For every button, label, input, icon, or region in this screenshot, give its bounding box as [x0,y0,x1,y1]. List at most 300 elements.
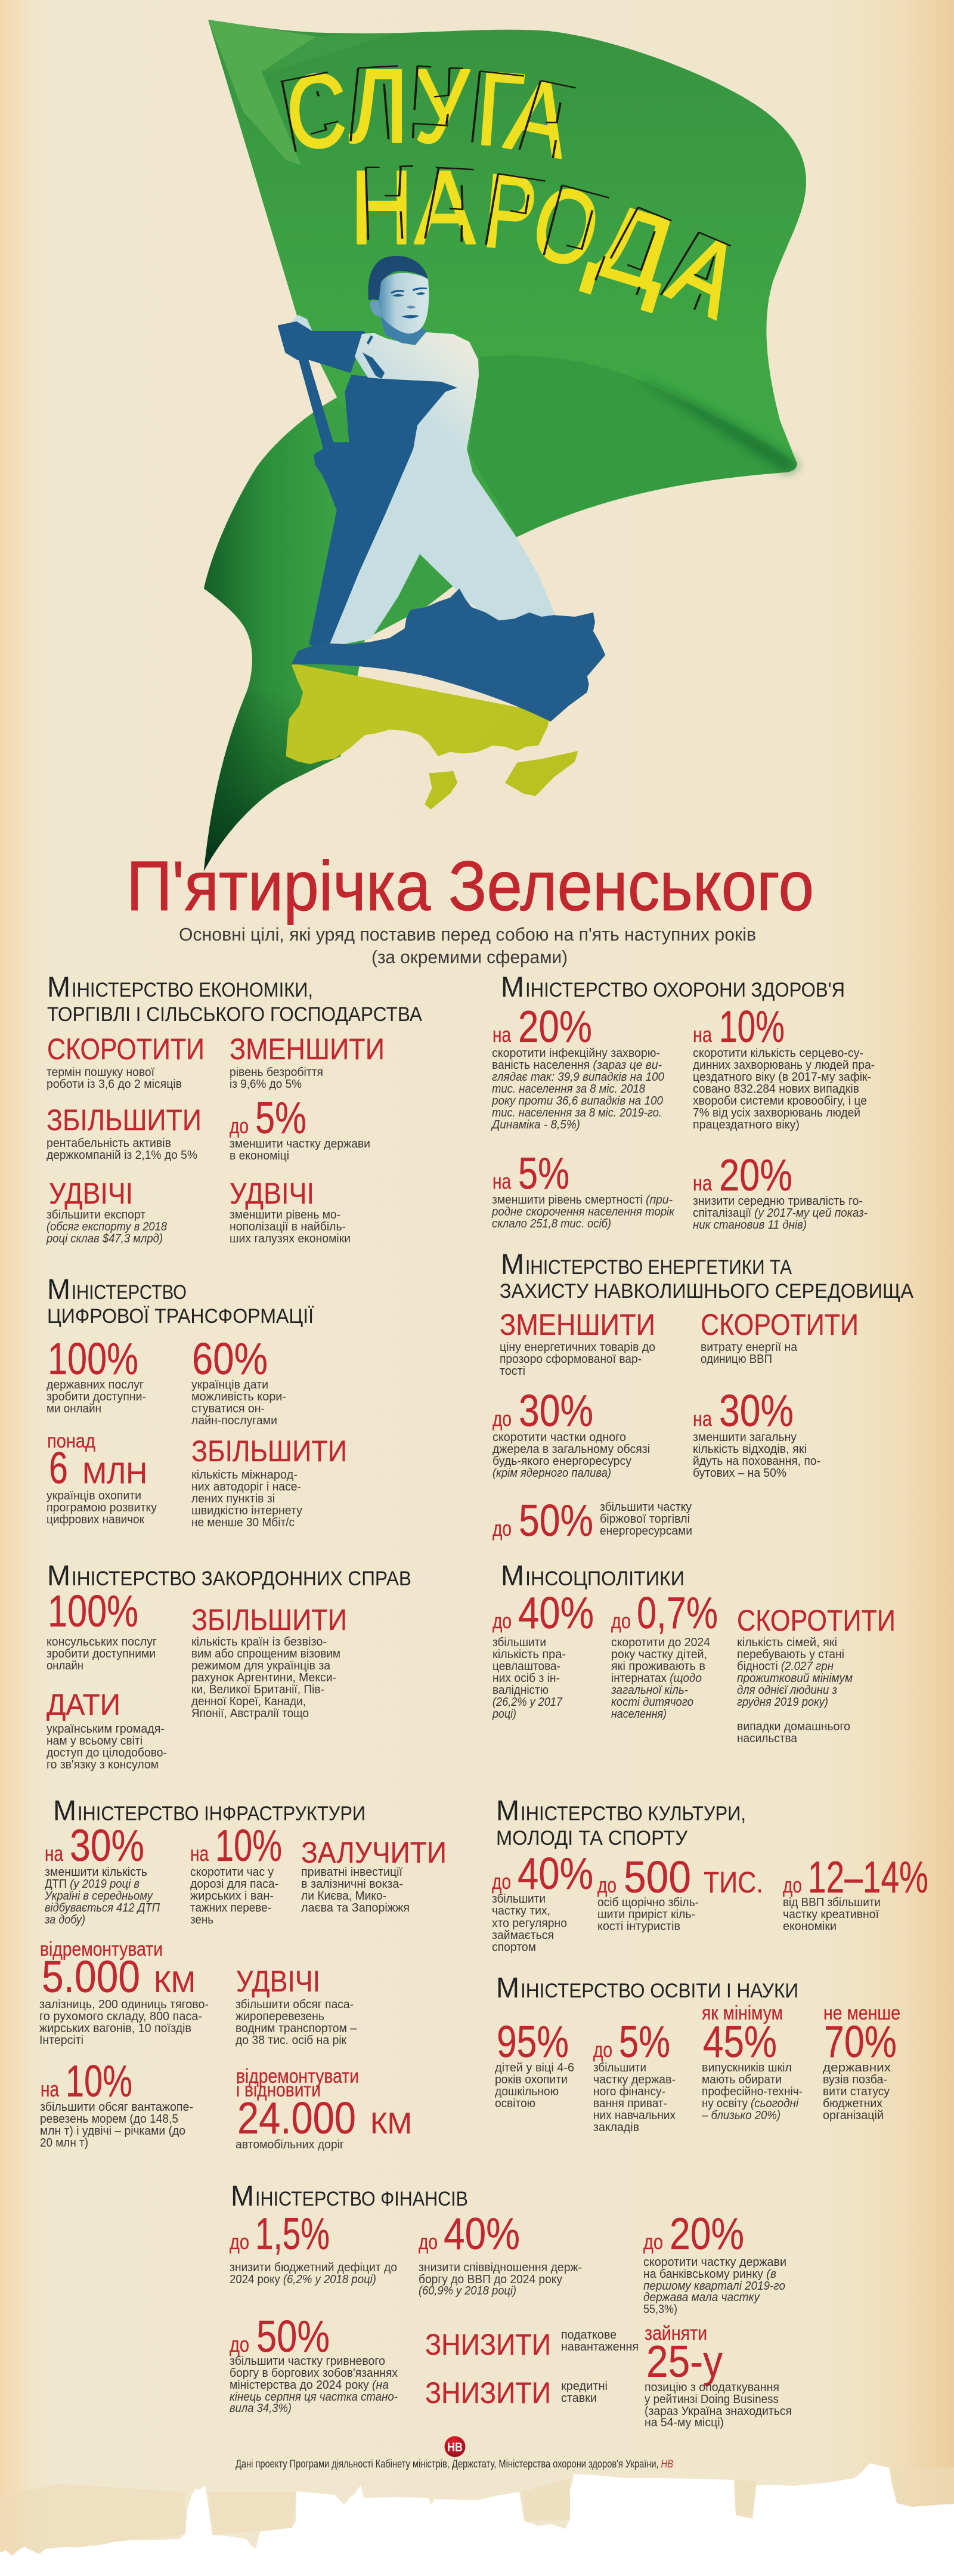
stat: дати: доступ до цілодобово- [47,1746,167,1759]
stat: скоротити: СКОРОТИТИ [737,1604,896,1637]
stat: до 50%: 50% [256,2311,330,2361]
stat: удвічі export: році склав $47,3 млрд) [46,1232,163,1245]
stat: до 12–14% [783,1852,928,1933]
stat: до 500 тис.: шити приріст кіль- [597,1908,695,1921]
stat: до 20%: 55,3%) [643,2303,677,2316]
stat: до 0,7%: які проживають в [611,1660,705,1673]
stat: до 40%: спортом [492,1941,536,1954]
stat: понад 6 млн: цифрових навичок [47,1513,144,1526]
stat: 95%: дітей у віці 4-6 [495,2061,574,2074]
stat: до 1,5%: 1,5% [255,2209,330,2259]
stat: на 30%: зменшити загальну [693,1431,797,1444]
stat: на 20% hospital: спіталізації (у 2017-му цей показ- [693,1207,868,1220]
heading [231,2181,468,2212]
stat: на 10% cargo: млн т) і удвічі – річками (до [40,2124,185,2138]
stat: до 50%: до [493,1516,512,1541]
stat: 24.000 км: КМ [370,2107,412,2140]
stat: до 1,5%: знизити бюджетний дефіцит до [230,2261,397,2274]
stat: на 10% cardio: скоротити кількість серцево-су- [693,1047,863,1060]
heading: ІНІСТЕРСТВО ОХОРОНИ ЗДОРОВ'Я [525,979,845,1001]
stat: на 20% infections [491,1001,664,1131]
stat: до 20%: скоротити частку держави [643,2256,786,2269]
heading: ІНІСТЕРСТВО ФІНАНСІВ [255,2188,468,2210]
stat: збільшити: ки, Великої Британії, Пів- [191,1683,324,1696]
stat: збільшити: ЗБІЛЬШИТИ [191,1603,347,1637]
stat: знизити tax burden: податкове [561,2328,617,2342]
stat: на 10% cardio: цездатного віку (в 2017-му зафік- [693,1071,871,1084]
icon: NV logo: НВ [447,2441,463,2454]
heading: МОЛОДІ ТА СПОРТУ [496,1827,687,1850]
stat: скоротити: випадки домашнього [737,1720,850,1733]
stat: скоротити: СКОРОТИТИ [47,1032,205,1066]
stat: удвічі monopoly [230,1177,351,1245]
stat: на 10% travel: зень [190,1913,213,1926]
stat: на 10% cargo [40,2056,193,2150]
stat: до 40%: них осіб з ін- [493,1672,560,1685]
stat: збільшити [47,1103,202,1162]
stat: до 30%: 30% [519,1386,593,1436]
heading: ІНІСТЕРСТВО ЗАКОРДОННИХ СПРАВ [72,1567,411,1590]
stat: до 0,7%: скоротити до 2024 [611,1636,710,1649]
stat: на 20% hospital [693,1150,868,1232]
stat: понад 6 млн: українців охопити [47,1489,141,1502]
figure holding flag pole [279,256,555,647]
heading [501,1560,684,1592]
stat: на 30%: на [693,1406,713,1431]
stat: на 5%: на [493,1169,512,1193]
stat: 5.000 км [39,1938,209,2047]
stat: залучити: в залізничні вокза- [301,1878,403,1891]
stat: скоротити [737,1604,896,1745]
stat: 100% [47,1334,146,1415]
stat: до 40%: хто регулярно [492,1917,567,1930]
slogan: СЛУГА НАРОДА: Л [349,48,408,165]
stat: 60%: 60% [192,1334,268,1384]
stat: не менше 70%: бюджетних [823,2097,882,2110]
stat: на 30%: бутових – на 50% [693,1467,786,1480]
stat: на 10% travel: дорозі для паса- [190,1878,278,1891]
stat: скоротити: одиницю ВВП [701,1353,772,1366]
stat: на 30%: зменшити кількість [45,1866,147,1879]
stat: до 1,5%: 2024 року (6,2% у 2018 році) [230,2273,376,2286]
stat: залучити: лаєва та Запоріжжя [301,1901,410,1915]
stat: скоротити: прожитковий мінімум [737,1672,853,1685]
stat: до 50%: біржової торгівлі [600,1513,690,1526]
stat: до 5%: вання приват- [593,2097,667,2110]
stat: 60%: лайн-послугами [191,1414,277,1427]
stat: до 20%: до [643,2229,663,2254]
heading: М [47,972,70,1003]
stat: удвічі monopoly: УДВІЧІ [230,1177,314,1210]
stat: як мінімум 45% [701,2002,803,2122]
stat: зменшити: ЗМЕНШИТИ [500,1308,655,1341]
stat: до 5%: 5% [619,2017,670,2067]
stat: до 40%: 40% [444,2209,520,2259]
stat: збільшити: режимом для українців за [191,1659,331,1672]
stat: на 20% hospital: 20% [719,1150,792,1200]
stat: удвічі monopoly: нополізації в найбіль- [230,1220,346,1233]
stat: удвічі: збільшити обсяг паса- [236,1998,354,2011]
stat: на 10% cardio: совано 832.284 нових випадків [693,1083,859,1096]
stat: залучити: ли Києва, Мико- [301,1890,386,1903]
stat: 24.000 км [236,2065,412,2151]
stat: до 12–14%: до [783,1873,802,1897]
stat: дати: ДАТИ [47,1688,120,1721]
stat: знизити credit rates: кредитні [561,2380,608,2393]
stat: на 10% travel: жирських і ван- [190,1890,274,1903]
stat: на 5%: 5% [518,1148,569,1198]
stat: на 10% cardio [693,1001,875,1131]
stat: 100%: зробити доступни- [47,1390,146,1403]
stat: зменшити: прозоро сформованої вар- [500,1353,642,1366]
stat: до 5%: зменшити частку держави [230,1137,370,1151]
stat: збільшити: лених пунктів зі [191,1492,275,1505]
map of Ukraine [286,589,605,809]
stat: 24.000 км: 24.000 [237,2093,356,2143]
stat: як мінімум 45%: мають обирати [702,2073,782,2086]
stat: удвічі [236,1965,357,2047]
stat: до 1,5%: до [230,2229,249,2254]
stat: на 10% travel: тажних переве- [190,1901,271,1915]
stat: до 30% [493,1386,650,1480]
stat: зменшити [500,1308,655,1378]
stat: понад 6 млн: МЛН [82,1456,147,1490]
stat: до 30%: джерела в загальному обсязі [493,1443,650,1456]
stat: удвічі: до 38 тис. осіб на рік [236,2034,346,2047]
stat: не менше 70%: організацій [823,2109,884,2122]
stat: удвічі monopoly: зменшити рівень мо- [230,1208,340,1221]
stat: 5.000 км: жирських вагонів, 10 поїздів [39,2022,191,2035]
stat: до 50%: збільшити частку [600,1501,692,1514]
heading: М [496,1795,519,1827]
slogan: СЛУГА НАРОДА: Н [351,150,413,266]
heading: М [496,1972,519,2004]
stat: як мінімум 45%: як мінімум [702,2002,783,2024]
stat: зайняти 25-у: 25-у [646,2336,723,2386]
stat: 95%: років охопити [495,2073,568,2086]
stat: на 30%: відбувається 412 ДТП [45,1901,160,1915]
stat: дати [47,1688,167,1771]
stat: збільшити: швидкістю інтернету [191,1504,302,1517]
stat: 100%: 100% [48,1334,138,1384]
stat: скоротити: перебувають у стані [737,1648,844,1661]
stat: на 5% [491,1148,675,1230]
stat: як мінімум 45%: 45% [703,2017,777,2067]
stat: до 500 тис.: кості інтуристів [597,1920,680,1933]
stat: до 50% [230,2311,398,2415]
stat: до 20%: першому кварталі 2019-го [643,2280,785,2293]
stat: до 40%: знизити співвідношення держ- [419,2261,582,2274]
stat: знизити tax burden [425,2328,639,2361]
stat: дати: го зв'язку з консулом [47,1758,159,1771]
stat: збільшити: ЗБІЛЬШИТИ [47,1103,202,1137]
stat: як мінімум 45%: ну освіту (сьогодні [702,2097,799,2110]
stat: до 20%: 20% [670,2209,744,2259]
title: П'ятирічка Зеленського [126,847,814,926]
stat: не менше 70%: 70% [824,2017,897,2067]
stat: до 50%: збільшити частку гривневого [230,2355,385,2368]
source note: Дані проекту Програми діяльності Кабінету міністрів, Держстату, Міністерства охорони здоров'я України, НВ [236,2458,673,2470]
stat: до 0,7%: року частку дітей, [611,1648,707,1661]
stat: удвічі: УДВІЧІ [236,1965,320,1998]
heading: ІНІСТЕРСТВО КУЛЬТУРИ, [521,1802,746,1825]
stat: до 50%: енергоресурсами [600,1524,692,1538]
stat: до 40%: 40% [518,1588,594,1638]
stat: до 500 тис.: осіб щорічно збіль- [597,1896,699,1909]
heading: М [501,1249,524,1281]
slogan: СЛУГА НАРОДА [281,48,757,340]
stat: скоротити: СКОРОТИТИ [701,1308,859,1341]
stat: на 20% infections: року проти 36,6 випадків на 100 [491,1094,663,1108]
stat: зменшити: рівень безробіття [230,1066,323,1079]
heading [47,1274,314,1328]
stat: на 20% hospital: ник становив 11 днів) [693,1219,807,1232]
stat: до 0,7%: інтернатах (щодо [611,1672,702,1685]
stat: 24.000 км: автомобільних доріг [236,2138,344,2151]
stat: до 40%: кількість пра- [493,1648,566,1661]
stat: на 10% cargo: 10% [66,2056,132,2106]
stat: до 0,7%: загальної кіль- [611,1684,688,1697]
heading: ІНІСТЕРСТВО [72,1281,187,1304]
stat: на 20% infections: ваність населення (зараз це ви- [492,1059,662,1072]
stat: зайняти 25-у: у рейтинзі Doing Business [645,2393,779,2406]
stat: до 40%: боргу до ВВП до 2024 року [419,2273,562,2286]
stat: 95%: 95% [497,2017,569,2067]
stat: зменшити: ціну енергетичних товарів до [500,1341,655,1354]
heading [496,1972,798,2004]
stat: на 20% infections: 20% [518,1001,592,1052]
stat: на 30%: кількість відходів, які [693,1443,807,1456]
stat: до 5%: ного фінансу- [593,2085,665,2098]
stat: на 10% cardio: динних захворювань у людей пра- [693,1059,875,1072]
stat: на 10% travel [190,1820,282,1926]
stat: до 40%: валідністю [493,1684,549,1697]
stat: 100%: онлайн [47,1659,83,1672]
heading: ТОРГІВЛІ І СІЛЬСЬКОГО ГОСПОДАРСТВА [47,1003,422,1026]
stat: скоротити: роботи із 3,6 до 2 місяців [47,1078,182,1091]
stat: на 30% [44,1820,160,1926]
stat: до 40%: збільшити [493,1636,546,1649]
slogan: СЛУГА НАРОДА: Г [473,50,527,169]
stat: на 20% infections: тис. населення за 8 міс. 2018 [492,1083,645,1096]
stat: до 40%: частку тих, [492,1904,550,1918]
portrait head [368,256,429,345]
stat: зайняти 25-у: позицію з оподаткування [645,2381,779,2394]
stat: зайняти 25-у: (зараз Україна знаходиться [645,2405,792,2418]
stat: удвічі export: УДВІЧІ [49,1177,133,1210]
stat: до 500 тис.: 500 [624,1852,691,1902]
heading: М [501,972,524,1003]
stat: збільшити: денної Кореї, Канади, [191,1695,306,1708]
heading [496,1795,746,1850]
panel: Ministry of Health [491,972,875,1232]
stat: до 0,7% [611,1588,718,1721]
stat: до 40% [419,2209,582,2297]
stat: понад 6 млн: понад [47,1430,95,1452]
stat: на 30%: за добу) [44,1913,85,1926]
panel: Ministry of Social Policy [492,1560,896,1745]
stat: 100% [47,1586,157,1672]
stat: на 20% hospital: на [693,1171,713,1195]
stat: понад 6 млн [47,1430,157,1526]
stat: на 30% [693,1386,820,1480]
stat: на 10% cargo: ревезень морем (до 148,5 [40,2113,178,2126]
stat: на 20% infections: на [493,1022,512,1047]
illustration: green flag with figure and map [204,20,806,871]
stat: 100%: державних послуг [47,1378,144,1391]
stat: дати: українським громадя- [47,1723,165,1736]
stat: до 12–14%: економіки [783,1920,837,1933]
stat: до 5%: в економіці [230,1149,289,1162]
panel: Ministry of Culture, Youth and Sport [492,1795,928,1954]
torn paper bottom edge [0,2463,954,2576]
stat: збільшити: кількість країн із безвізо- [191,1635,327,1649]
stat: збільшити: вим або спрощеним візовим [191,1647,340,1660]
stat: на 10% travel: 10% [215,1820,282,1870]
heading: М [53,1795,76,1827]
stat: скоротити [701,1308,859,1366]
stat: удвічі monopoly: ших галузях економіки [230,1232,351,1245]
stat: як мінімум 45%: випускників шкіл [702,2061,792,2074]
stat: удвічі: жироперевезень [236,2010,324,2023]
stat: 95% [495,2017,574,2110]
stat: збільшити [191,1603,347,1720]
stat: не менше 70%: вузів позба- [823,2073,887,2086]
stat: на 10% cargo: збільшити обсяг вантажопе- [40,2101,193,2114]
stat: на 10% cardio: на [693,1022,713,1047]
stat: 5.000 км: КМ [154,1965,196,1999]
stat: до 0,7%: населення) [611,1708,667,1721]
stat: до 40%: до [493,1609,512,1633]
stat: 100%: консульських послуг [47,1635,157,1649]
stat: збільшити [191,1434,347,1529]
heading [47,1560,411,1592]
stat: залучити: ЗАЛУЧИТИ [301,1836,447,1869]
heading: М [47,1560,70,1592]
stat: удвічі export [46,1177,167,1245]
stat: до 40%: цевлаштова- [493,1660,560,1673]
stat: 5.000 км: відремонтувати [40,1938,163,1960]
icon: NV logo [445,2436,465,2457]
slogan: СЛУГА НАРОДА: У [414,48,470,165]
stat: до 5%: частку держав- [593,2073,676,2086]
stat: скоротити: бідності (2.027 грн [737,1660,834,1673]
stat: 100%: ми онлайн [47,1402,101,1415]
stat: на 10% cargo: на [41,2077,60,2101]
stat: до 12–14%: від ВВП збільшити [783,1896,881,1909]
stat: до 0,7%: кості дитячого [611,1696,693,1709]
stat: залучити: приватні інвестиції [301,1866,402,1879]
stat: до 40%: займається [492,1929,554,1942]
slogan: СЛУГА НАРОДА: А [653,210,757,340]
stat: до 50%: кінець серпня ця частка стано- [230,2391,398,2404]
stat: не менше 70%: не менше [823,2002,900,2024]
stat: збільшити: них автодоріг і насе- [191,1480,301,1493]
panel: Ministry of Infrastructure [39,1795,447,2151]
stat: знизити credit rates: ЗНИЗИТИ [425,2376,551,2410]
stat: до 1,5% [230,2209,397,2286]
stat: на 20% infections: тис. населення за 8 міс. 2019-го. [492,1106,662,1120]
stat: зайняти 25-у: зайняти [645,2322,707,2344]
stat: удвічі export: збільшити експорт [47,1208,145,1221]
stat: на 20% infections: глядає так: 39,9 випадків на 100 [492,1071,664,1084]
stat: збільшити: рахунок Аргентини, Мекси- [191,1671,336,1684]
stat: 5.000 км: 5.000 [42,1952,140,2002]
stat: на 10% cardio: 7% від усіх захворювань людей [693,1106,860,1120]
heading: ІНСОЦПОЛІТИКИ [525,1567,684,1590]
heading: ЦИФРОВОЇ ТРАНСФОРМАЦІЇ [47,1305,314,1328]
flag [204,20,806,871]
stat: до 5% [593,2017,676,2134]
stat: понад 6 млн: програмою розвитку [47,1501,157,1514]
stat: скоротити: кількість сімей, які [737,1636,837,1649]
stat: на 30%: Україні в середньому [44,1890,153,1903]
slogan: СЛУГА НАРОДА: Д [579,181,687,314]
heading: М [231,2181,254,2212]
subtitle: Основні цілі, які уряд поставив перед собою на п'ять наступних років [179,924,756,945]
stat: збільшити: ЗБІЛЬШИТИ [191,1434,347,1468]
heading: ІНІСТЕРСТВО ЕНЕРГЕТИКИ ТА [525,1256,792,1279]
slogan: СЛУГА НАРОДА: О [521,163,611,291]
stat: на 30%: йдуть на поховання, по- [693,1455,820,1468]
stat: до 5%: закладів [593,2121,639,2134]
stat: збільшити: рентабельність активів [47,1137,171,1150]
slogan: СЛУГА НАРОДА: А [414,150,475,266]
stat: 60%: українців дати [191,1378,268,1391]
stat: до 30%: до [493,1406,512,1431]
stat: до 5%: до [230,1114,249,1138]
stat: до 0,7%: 0,7% [637,1588,718,1638]
stat: до 50%: 50% [519,1495,593,1545]
stat: на 30%: ДТП (у 2019 році в [45,1878,140,1891]
stat: збільшити: кількість міжнарод- [191,1468,298,1482]
stat: до 40% [492,1848,593,1954]
heading [501,972,845,1003]
stat: до 0,7%: до [611,1609,631,1633]
stat: скоротити: витрату енергії на [701,1341,798,1354]
heading: М [47,1274,70,1306]
subtitle [179,924,756,967]
stat: до 20%: держава мала частку [643,2291,760,2304]
stat: 60%: стуватися он- [191,1402,265,1415]
stat: до 12–14%: частку креативної [783,1908,879,1921]
stat: до 500 тис.: ТИС. [704,1866,763,1899]
stat: удвічі export: (обсяг експорту в 2018 [47,1220,167,1233]
stat: знизити tax burden: ЗНИЗИТИ [425,2328,551,2361]
stat: до 50%: боргу в боргових зобов'язаннях [230,2367,398,2380]
stat: до 30%: (крім ядерного палива) [493,1467,611,1480]
stat: скоротити: насильства [737,1732,798,1745]
stat: дати: нам у всьому світі [47,1734,143,1748]
stat: зайняти 25-у [645,2322,792,2429]
stat: до 40%: (60,9% у 2018 році) [419,2284,516,2297]
stat: 5.000 км: го рухомого складу, 800 паса- [39,2010,202,2023]
stat: до 20% [643,2209,786,2316]
stat: на 30%: 30% [70,1820,144,1870]
heading: ЗАХИСТУ НАВКОЛИШНЬОГО СЕРЕДОВИЩА [500,1280,913,1303]
stat: збільшити: держкомпаній із 2,1% до 5% [47,1149,197,1162]
stat: на 5%: склало 251,8 тис. осіб) [492,1217,611,1230]
stat: до 40% [492,1588,594,1721]
stat: до 5% [230,1093,370,1162]
stat: до 40%: 40% [518,1848,593,1898]
stat: до 5%: 5% [255,1093,306,1143]
stat: зменшити: із 9,6% до 5% [230,1078,302,1091]
stat: до 40%: році) [492,1708,516,1721]
stat: зменшити: ЗМЕНШИТИ [230,1032,385,1066]
panel: Ministry of Economy [46,972,422,1245]
stat: на 10% cargo: 20 млн т) [40,2136,88,2150]
